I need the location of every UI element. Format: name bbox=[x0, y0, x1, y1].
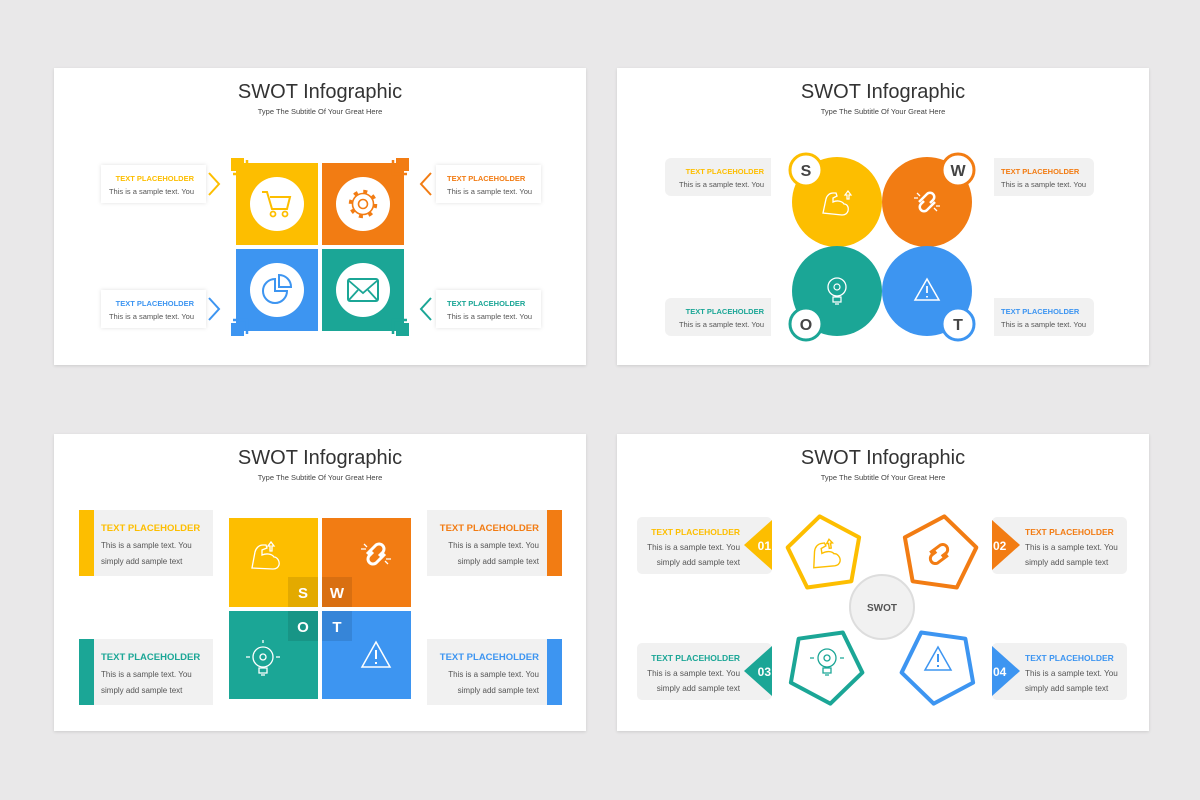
arrow: bottom right bbox=[421, 298, 431, 320]
text box: 03 bbox=[637, 643, 772, 700]
text box: top left: TEXT PLACEHOLDER bbox=[116, 174, 195, 183]
text box: bottom left: This is a sample text. You bbox=[679, 320, 764, 329]
text box: top right bbox=[427, 510, 562, 576]
title: SWOT Infographic bbox=[238, 81, 402, 103]
icon: pie chart bbox=[250, 263, 304, 317]
text box: 03: 03 bbox=[758, 665, 771, 679]
text box: bottom left: simply add sample text bbox=[101, 686, 183, 695]
pentagon: opportunities bbox=[785, 631, 866, 709]
pentagon: strengths bbox=[784, 511, 865, 589]
text box: bottom left: This is a sample text. You bbox=[109, 312, 194, 321]
text box: top left: TEXT PLACEHOLDER bbox=[686, 167, 765, 176]
circle: weaknesses bbox=[882, 157, 972, 247]
icon: lightbulb bbox=[246, 640, 280, 675]
block grid: T bbox=[332, 619, 342, 636]
text box: 03: TEXT PLACEHOLDER bbox=[651, 653, 740, 663]
icon: gear bbox=[336, 177, 390, 231]
text box: top right: TEXT PLACEHOLDER bbox=[447, 174, 526, 183]
text box: top right bbox=[436, 165, 541, 203]
text box: top left: TEXT PLACEHOLDER bbox=[101, 523, 200, 534]
center circle: SWOT bbox=[867, 603, 897, 614]
center circle bbox=[850, 575, 914, 639]
text box: 04: simply add sample text bbox=[1025, 684, 1109, 693]
text box: bottom left: TEXT PLACEHOLDER bbox=[116, 299, 195, 308]
text box: 02 bbox=[992, 517, 1127, 574]
panel: square grid SWOT bbox=[54, 68, 586, 365]
text box: bottom right: simply add sample text bbox=[458, 686, 540, 695]
subtitle: Type The Subtitle Of Your Great Here bbox=[821, 473, 945, 482]
subtitle: Type The Subtitle Of Your Great Here bbox=[258, 473, 382, 482]
text box: bottom right bbox=[427, 639, 562, 705]
text box: top right: This is a sample text. You bbox=[1001, 180, 1086, 189]
title: SWOT Infographic bbox=[801, 447, 965, 469]
text box: top right: TEXT PLACEHOLDER bbox=[440, 523, 539, 534]
badge: S: S bbox=[801, 163, 812, 180]
title: SWOT Infographic bbox=[801, 81, 965, 103]
badge: O bbox=[790, 308, 822, 340]
text box: bottom right: TEXT PLACEHOLDER bbox=[1001, 307, 1080, 316]
panel: square blocks with letters bbox=[54, 434, 586, 731]
text box: 03: This is a sample text. You bbox=[647, 669, 740, 678]
badge: W bbox=[942, 154, 974, 186]
pentagon: weaknesses bbox=[899, 511, 980, 589]
text box: bottom right: This is a sample text. You bbox=[447, 312, 532, 321]
text box: bottom left: TEXT PLACEHOLDER bbox=[686, 307, 765, 316]
block grid bbox=[229, 518, 411, 699]
icon: warning bbox=[925, 647, 951, 670]
subtitle: Type The Subtitle Of Your Great Here bbox=[258, 107, 382, 116]
panel: pentagons SWOT bbox=[617, 434, 1149, 731]
text box: top left bbox=[101, 165, 206, 203]
pentagon: threats bbox=[898, 631, 979, 709]
text box: top left: This is a sample text. You bbox=[101, 541, 192, 550]
text box: 04: 04 bbox=[993, 665, 1007, 679]
text box: 02: simply add sample text bbox=[1025, 558, 1109, 567]
text box: 01: TEXT PLACEHOLDER bbox=[651, 527, 740, 537]
text box: 03: simply add sample text bbox=[657, 684, 741, 693]
text box: 04: This is a sample text. You bbox=[1025, 669, 1118, 678]
icon: warning bbox=[362, 642, 390, 667]
block grid: W bbox=[330, 585, 345, 602]
text box: bottom right: TEXT PLACEHOLDER bbox=[447, 299, 526, 308]
text box: top right: This is a sample text. You bbox=[448, 541, 539, 550]
panel: circles SWOT bbox=[617, 68, 1149, 365]
text box: bottom left bbox=[79, 639, 213, 705]
arrow: top left bbox=[209, 173, 219, 195]
text box: 01: This is a sample text. You bbox=[647, 543, 740, 552]
text box: bottom right: TEXT PLACEHOLDER bbox=[440, 652, 539, 663]
icon: broken link bbox=[361, 544, 391, 564]
text box: bottom right bbox=[994, 298, 1094, 336]
text box: 04: TEXT PLACEHOLDER bbox=[1025, 653, 1114, 663]
badge: S bbox=[790, 154, 822, 186]
badge: T bbox=[942, 308, 974, 340]
text box: 02: 02 bbox=[993, 539, 1007, 553]
circle: opportunities bbox=[792, 246, 882, 336]
text box: top right: simply add sample text bbox=[458, 557, 540, 566]
icon: muscle bbox=[252, 542, 279, 569]
circle: strengths bbox=[792, 157, 882, 247]
text box: bottom left bbox=[665, 298, 771, 336]
text box: 02: This is a sample text. You bbox=[1025, 543, 1118, 552]
text box: top left bbox=[665, 158, 771, 196]
subtitle: Type The Subtitle Of Your Great Here bbox=[821, 107, 945, 116]
arrow: top right bbox=[421, 173, 431, 195]
text box: top left bbox=[79, 510, 213, 576]
arrow: bottom left bbox=[209, 298, 219, 320]
text box: 04 bbox=[992, 643, 1127, 700]
block grid: S bbox=[298, 585, 308, 602]
text box: bottom right bbox=[436, 290, 541, 328]
text box: 02: TEXT PLACEHOLDER bbox=[1025, 527, 1114, 537]
text box: top left: simply add sample text bbox=[101, 557, 183, 566]
text box: top right: This is a sample text. You bbox=[447, 187, 532, 196]
text box: top right bbox=[994, 158, 1094, 196]
text box: top right: TEXT PLACEHOLDER bbox=[1001, 167, 1080, 176]
title: SWOT Infographic bbox=[238, 447, 402, 469]
icon: lightbulb bbox=[810, 649, 844, 675]
text box: 01 bbox=[637, 517, 772, 574]
text box: bottom left: TEXT PLACEHOLDER bbox=[101, 652, 200, 663]
badge: O: O bbox=[800, 317, 812, 334]
square grid bbox=[231, 158, 409, 336]
block grid: O bbox=[297, 619, 309, 636]
badge: W: W bbox=[950, 163, 966, 180]
text box: top left: This is a sample text. You bbox=[109, 187, 194, 196]
text box: bottom right: This is a sample text. You bbox=[1001, 320, 1086, 329]
text box: 01: 01 bbox=[758, 539, 771, 553]
badge: T: T bbox=[953, 317, 963, 334]
text box: 01: simply add sample text bbox=[657, 558, 741, 567]
text box: bottom left: This is a sample text. You bbox=[101, 670, 192, 679]
icon: envelope bbox=[336, 263, 390, 317]
text box: bottom right: This is a sample text. You bbox=[448, 670, 539, 679]
icon: cart bbox=[250, 177, 304, 231]
text box: bottom left bbox=[101, 290, 206, 328]
circle: threats bbox=[882, 246, 972, 336]
text box: top left: This is a sample text. You bbox=[679, 180, 764, 189]
